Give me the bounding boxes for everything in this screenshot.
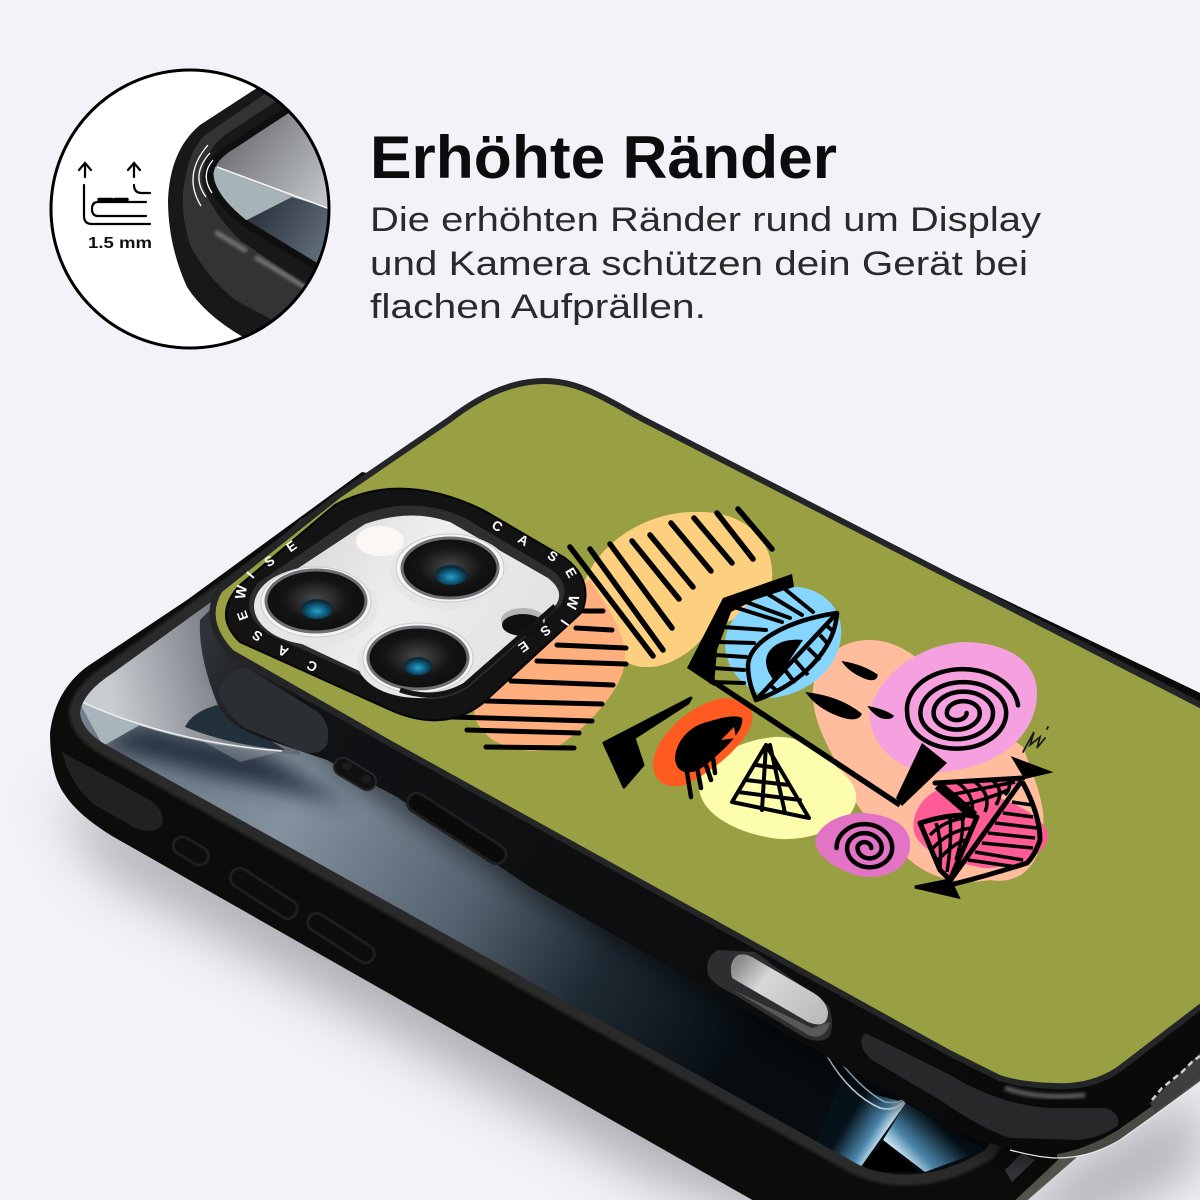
brand lettering: A	[515, 531, 531, 549]
close-up impact arcs	[193, 145, 213, 206]
wallpaper blades	[815, 1085, 906, 1168]
raised edge icon	[79, 163, 150, 224]
eye pupil	[766, 640, 803, 682]
lens three	[357, 623, 479, 698]
camera bump	[226, 489, 586, 720]
screen curved line	[82, 702, 282, 751]
phone back rim	[216, 384, 1200, 1083]
shadow on back screen	[205, 660, 1040, 1170]
blob: magenta	[815, 813, 910, 877]
blob: pink	[870, 642, 1037, 772]
brand lettering: W	[233, 584, 251, 600]
leaf figure	[915, 758, 1050, 897]
drop shadow under phones	[55, 790, 1200, 1200]
blob: blue	[725, 587, 841, 698]
circle white fill	[51, 70, 329, 348]
camera plate	[255, 515, 559, 695]
body text	[370, 201, 1041, 326]
brand lettering: E	[234, 609, 251, 622]
blob: hot pink	[913, 787, 1048, 868]
stripes: salmon blob	[452, 611, 626, 748]
brand lettering: I	[244, 569, 258, 581]
close-up highlights	[217, 233, 310, 290]
close-up corner of case	[168, 88, 328, 336]
brand lettering: C	[304, 657, 320, 675]
close-up screen wedge	[214, 167, 284, 220]
house outline with eye	[687, 574, 947, 806]
camera inner lip	[249, 505, 564, 699]
front phone	[200, 378, 1200, 1170]
artist signature	[1023, 727, 1048, 752]
spiral small	[837, 824, 892, 867]
brand lettering: E	[516, 638, 532, 655]
back phone screen	[80, 602, 990, 1174]
brand lettering: A	[275, 642, 291, 660]
front mute switch	[331, 754, 379, 794]
blob: yellow orange	[584, 512, 772, 667]
back phone buttons	[170, 833, 378, 966]
lens one	[254, 567, 378, 645]
eye lower slats	[770, 625, 834, 692]
back phone screen rim	[80, 505, 1100, 1174]
phone bottom-right speaker	[1150, 1053, 1200, 1112]
screen sheen	[197, 738, 282, 762]
brow	[604, 698, 691, 787]
brand lettering: S	[261, 553, 277, 570]
corner highlight	[1005, 1088, 1085, 1096]
blob: pale salmon	[813, 640, 1044, 882]
close-up screen rim	[210, 110, 317, 267]
screen wallpaper top	[82, 602, 300, 755]
stripes: orange blob	[570, 509, 772, 656]
back phone with bumper case	[50, 472, 1120, 1200]
lens two	[390, 534, 510, 610]
eye outline	[748, 613, 837, 700]
house slats	[711, 590, 813, 683]
screen dark band	[95, 725, 350, 805]
body text: flachen Aufprällen.	[370, 288, 706, 326]
front phone corner patch	[861, 1033, 1118, 1140]
close-up translucent band	[183, 92, 312, 320]
front phone carbon patch	[218, 668, 328, 753]
detail circle	[51, 70, 340, 348]
close-up screen top	[214, 113, 328, 220]
house filled frame	[687, 574, 794, 686]
back phone port	[1005, 1153, 1035, 1182]
front phone bottom lip	[1057, 1062, 1200, 1158]
blob: orange red	[653, 698, 753, 786]
brand lettering: C	[489, 517, 505, 535]
nose line	[711, 680, 900, 805]
screen dark blob	[185, 705, 285, 750]
spiral large	[907, 669, 1018, 749]
artwork	[452, 509, 1050, 897]
flash	[356, 526, 404, 556]
front phone side	[200, 378, 1200, 1158]
brand lettering: S	[538, 622, 554, 639]
blob: pale yellow	[699, 737, 856, 839]
small eye	[675, 716, 742, 797]
phone back green panel	[216, 384, 1200, 1083]
body text: und Kamera schützen dein Gerät bei	[370, 245, 1028, 283]
heading: Erhöhte Ränder	[370, 124, 837, 191]
brand lettering: E	[562, 565, 580, 580]
brand lettering: S	[249, 627, 265, 644]
grid triangle	[732, 745, 809, 818]
body text: Die erhöhten Ränder rund um Display	[370, 201, 1041, 239]
lidar sensor	[501, 608, 545, 636]
brand lettering: I	[557, 617, 572, 628]
blob: salmon	[474, 580, 625, 751]
close-up screen dark	[246, 197, 328, 262]
teardrops	[807, 662, 893, 719]
brand lettering	[233, 517, 581, 675]
nose wedge	[896, 743, 947, 806]
back phone body	[50, 472, 1060, 1200]
brand lettering: S	[545, 548, 561, 565]
front power button	[404, 789, 510, 867]
charging port	[707, 950, 832, 1041]
brand lettering: W	[562, 593, 581, 611]
camera ring	[226, 489, 586, 720]
circle outline	[51, 70, 329, 348]
back phone edge sliver	[1010, 1150, 1085, 1200]
back phone corner patch	[62, 752, 162, 831]
ring repair over lidar	[400, 606, 555, 695]
measurement label: 1.5 mm	[88, 235, 152, 252]
screen wedge	[82, 702, 140, 744]
brand lettering: E	[283, 538, 299, 555]
